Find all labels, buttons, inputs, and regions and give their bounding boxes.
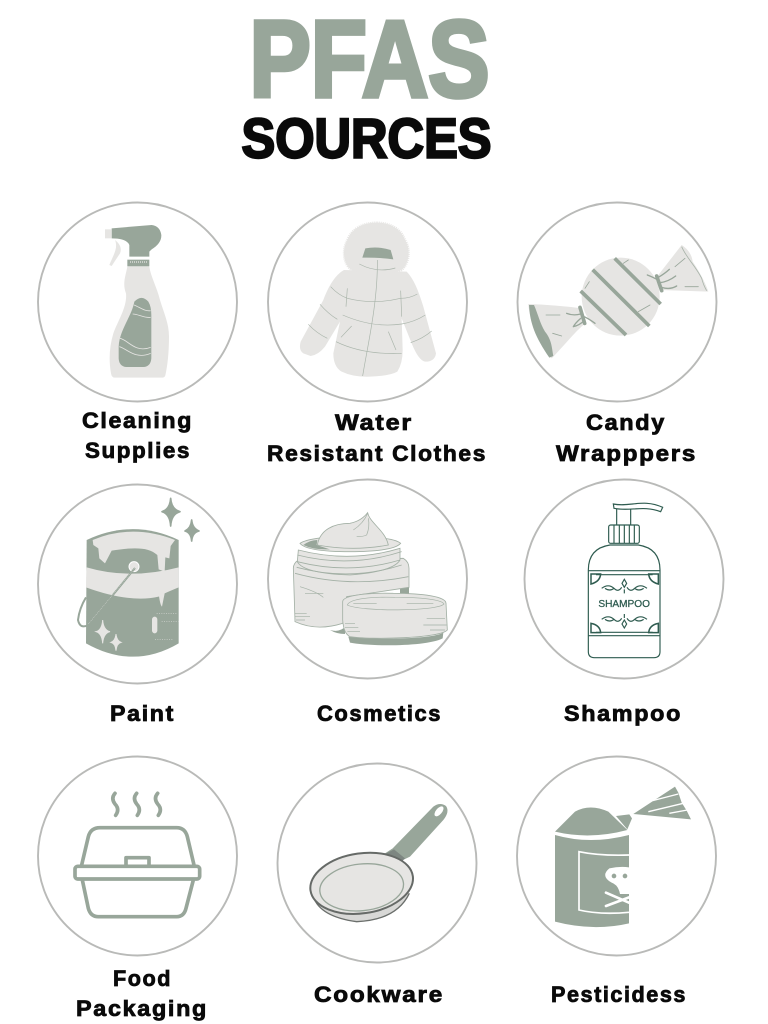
label: Water [335,410,413,435]
circle frame [524,480,724,678]
panel: paint [38,484,237,726]
label: Cosmetics [317,701,442,726]
circle frame [517,756,716,956]
panel: cookware [278,764,476,1007]
icon: shampoo bottle [588,503,663,658]
label: Shampoo [564,701,682,726]
panel: cosmetics [268,480,467,726]
circle frame [278,764,476,962]
label: Paint [110,701,175,726]
icon: frying pan [306,804,447,922]
label: Candy [586,410,666,435]
icon: jacket [300,223,436,377]
label: Pesticidess [551,982,687,1007]
panel: cleaning supplies [38,202,237,463]
circle frame [38,756,237,956]
icon: cosmetic jar [293,513,447,645]
icon: spray bottle [105,225,169,378]
circle frame [518,202,716,402]
heading: SOURCES: SOURCES [242,106,492,170]
icon: candy [528,245,708,358]
icon: paint can [78,498,199,657]
panel: water resistant clothes [267,202,487,466]
panel: shampoo [524,480,724,726]
circle frame [38,484,237,684]
label: Cleaning [82,408,193,433]
circle frame [38,202,237,402]
panel: pesticides [517,756,716,1007]
bottle label text: SHAMPOO [598,599,650,610]
heading: PFAS: PFAS [250,0,490,120]
label [267,410,487,466]
panel: food packaging [38,756,237,1021]
title [242,0,492,170]
label: Packaging [76,996,208,1021]
label [76,966,208,1021]
label: Cookware [314,982,444,1007]
icon: food container [75,793,200,917]
label: Resistant Clothes [267,441,487,466]
circle frame [268,202,467,402]
label: Supplies [85,438,191,463]
panel: candy wrappers [518,202,716,466]
label [556,410,697,466]
icon: pesticide spray can [555,787,691,927]
label: Food [113,966,172,991]
label [82,408,193,463]
label: Wrapppers [556,441,697,466]
circle frame [268,480,467,678]
